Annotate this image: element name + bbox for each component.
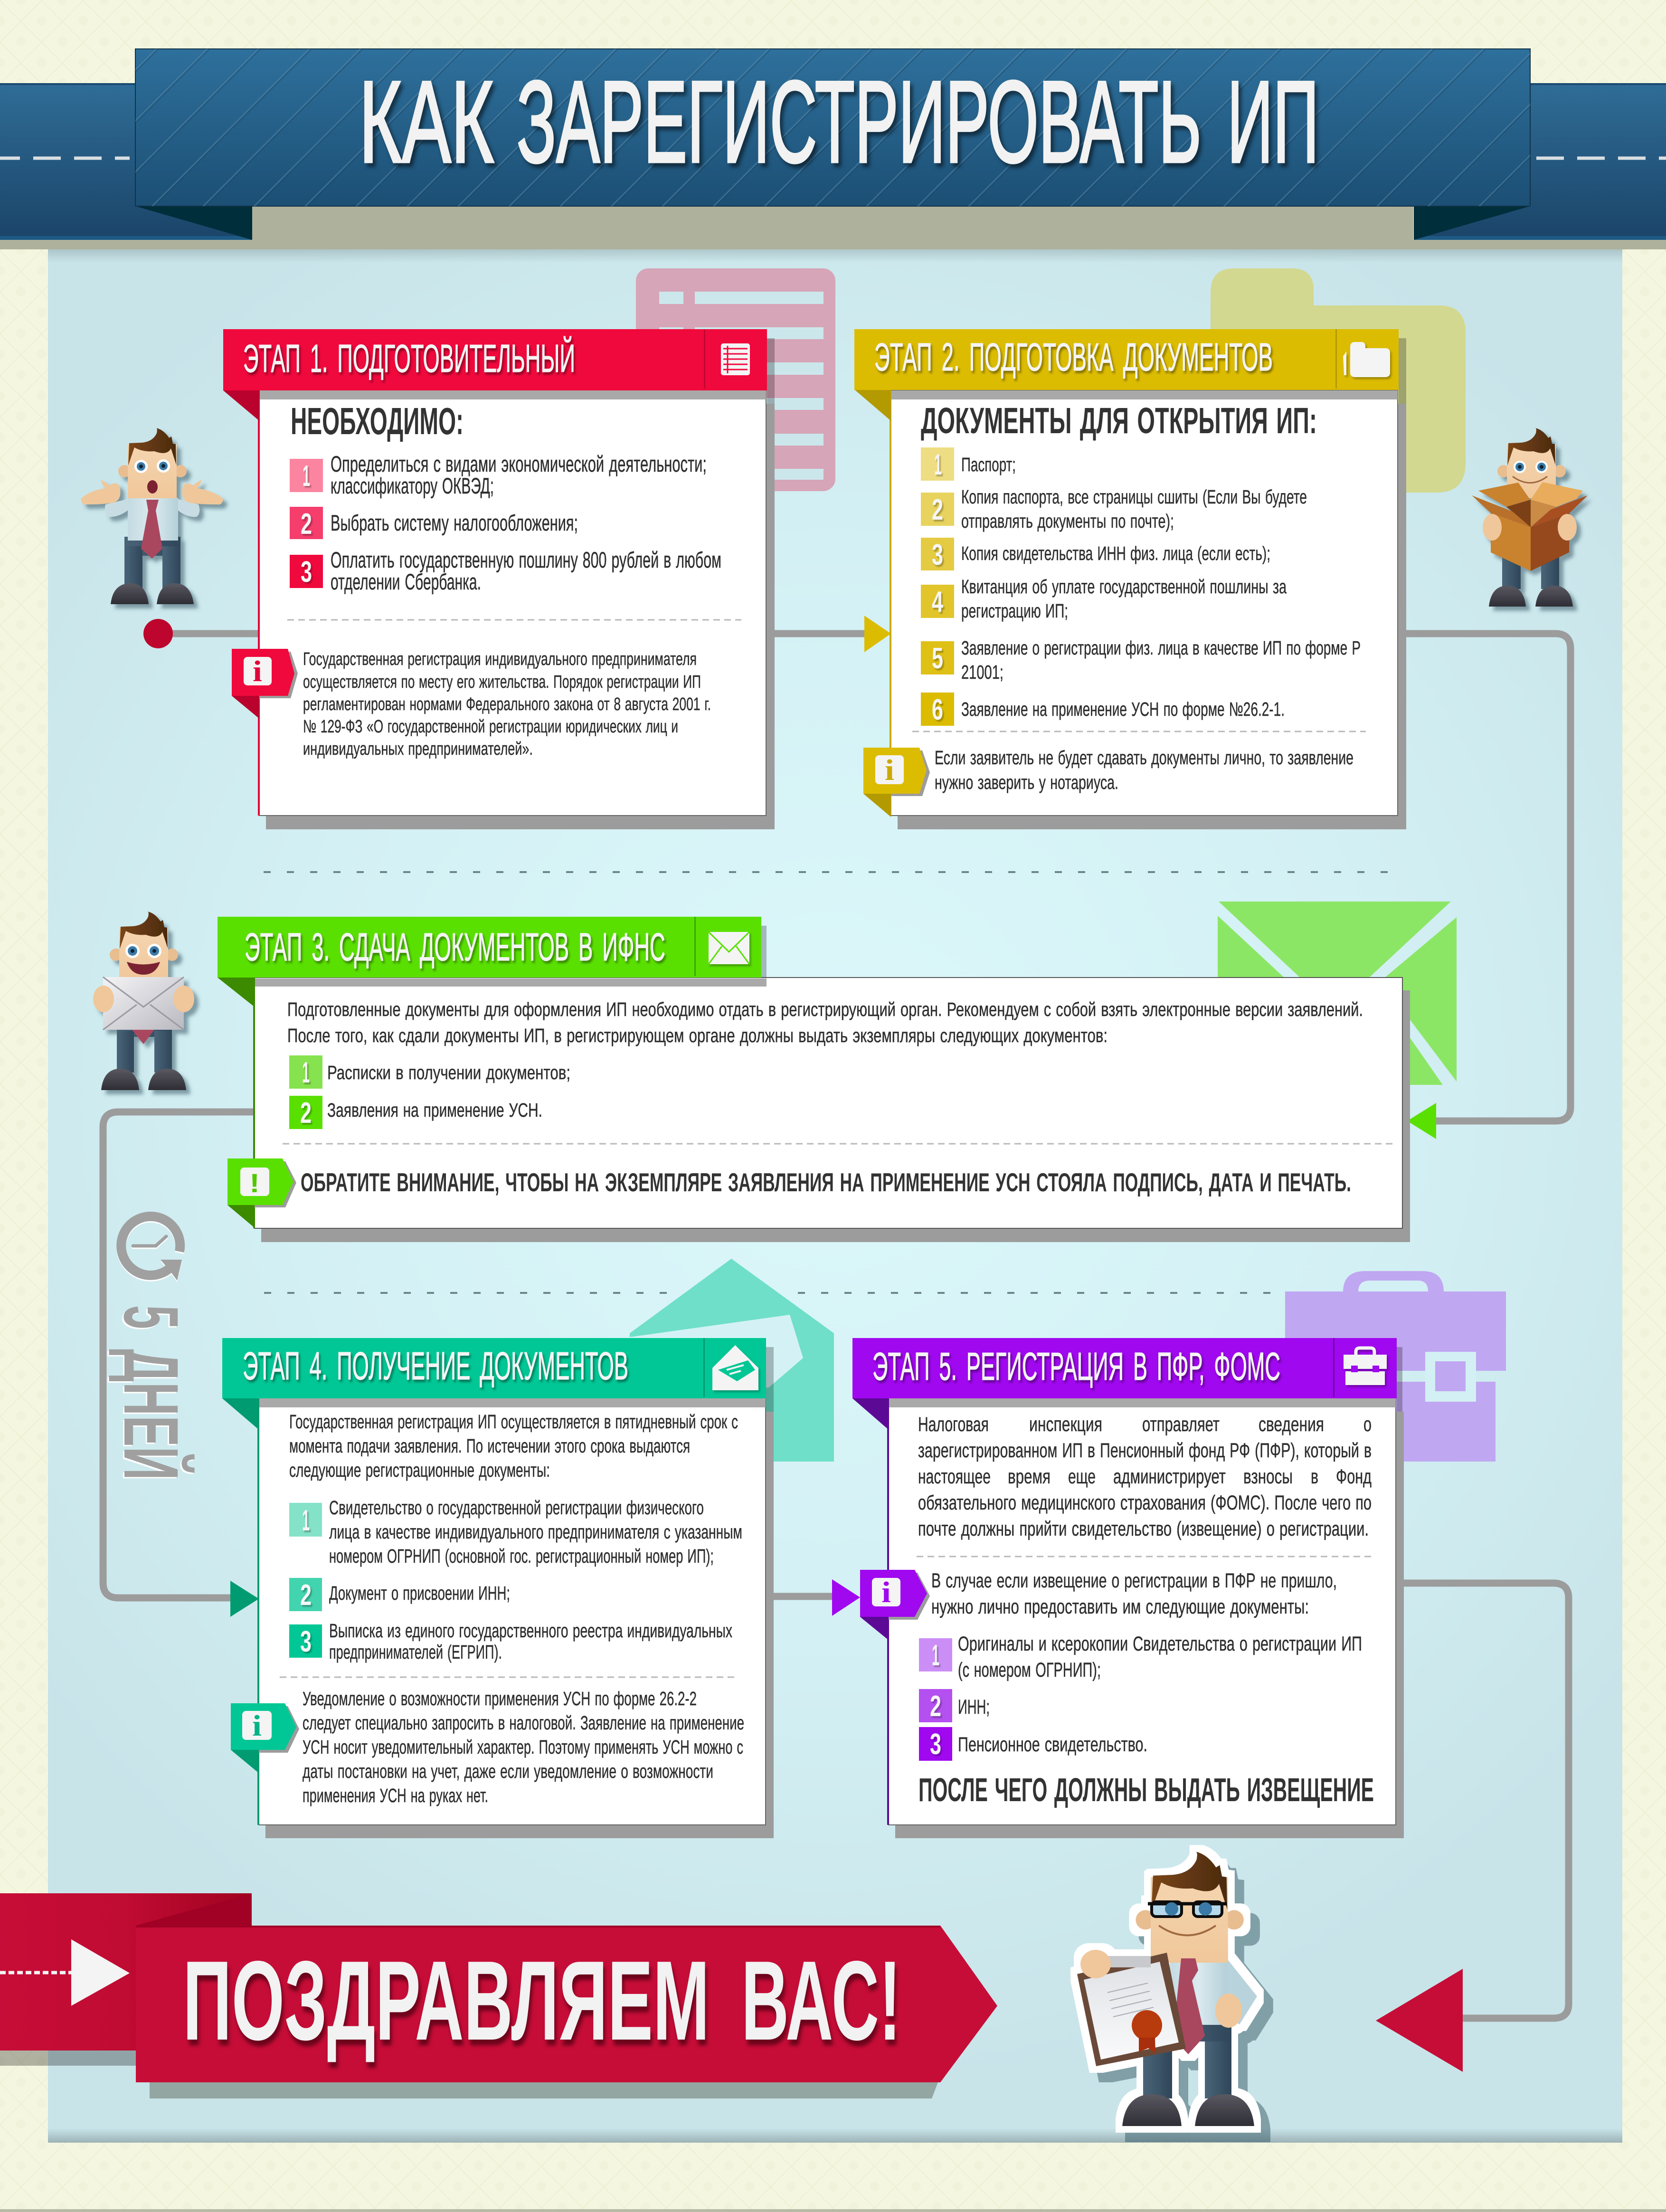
list: stage 5: Пенсионное свидетельство. [958,1733,1147,1756]
panel: stage 5 [852,1338,1404,1838]
header: stage 4: ЭТАП 4. ПОЛУЧЕНИЕ ДОКУМЕНТОВ [243,1344,628,1388]
title ribbon left [0,83,252,240]
info text: stage 5: нужно лично предоставить им следующие документы: [931,1595,1309,1618]
list: stage 3: 2 [300,1097,312,1130]
list: stage 3: 1 [302,1056,310,1089]
info text: stage 4: даты постановки на учет, даже если уведомление о возможности [303,1760,713,1782]
divider dashes between rows [264,872,1389,1293]
list: stage 2: регистрацию ИП; [961,600,1068,622]
intro text: stage 5: о [1363,1413,1372,1436]
list: stage 3 [289,1055,570,1130]
list: stage 1: классификатору ОКВЭД; [331,473,494,498]
info tag: stage 5: i [881,1576,891,1609]
intro text: stage 3 [287,998,1363,1046]
list: stage 1: Определиться с видами экономической деятельности; [331,451,707,476]
arrow: to stage 3 [1407,1103,1436,1139]
clock icon [121,1216,182,1281]
icon: list document [721,343,750,375]
list: stage 1 [290,451,721,594]
list: stage 2: Паспорт; [961,454,1016,475]
intro text: stage 5: инспекция [1029,1413,1102,1436]
panel: stage 4 [222,1338,774,1838]
intro text: stage 4: момента подачи заявления. По истечении этого срока выдаются [289,1435,690,1457]
info text: stage 1 [303,649,711,759]
warning tag: stage 3: ! [249,1168,260,1198]
start dot [143,619,173,648]
header: stage 5 [852,1338,1397,1398]
arrow: to stage 5 [832,1579,860,1616]
intro text: stage 5: зарегистрированном ИП в Пенсионный фонд РФ (ПФР), который в [918,1439,1372,1462]
info text: stage 4: Уведомление о возможности применения УСН по форме 26.2-2 [303,1688,697,1709]
list: stage 5: ИНН; [958,1696,990,1718]
arrow: to stage 2 [864,616,891,652]
list: stage 2: Заявление на применение УСН по форме №26.2-1. [961,698,1285,720]
info text: stage 1: индивидуальных предпринимателей». [303,739,533,759]
list: stage 4: 3 [300,1625,312,1658]
warning tag: stage 3 [227,1158,296,1228]
arrow: to stage 4 [230,1581,259,1617]
finish banner shadow [150,2082,938,2098]
intro text: stage 4 [289,1411,738,1481]
list: stage 2 [921,447,1361,726]
info text: stage 2: Если заявитель не будет сдавать документы лично, то заявление [935,747,1354,769]
list: stage 2: 3 [932,539,943,571]
rotated label: 5 days: ДНЕЙ [108,1349,195,1480]
list: stage 4: 2 [300,1579,312,1612]
intro text: stage 3: После того, как сдали документы ИП, в регистрирующем органе должны выдать экземпляры следующих документов: [287,1025,1108,1046]
title [359,57,1319,187]
info text: stage 1: регламентирован нормами Федерального закона от 8 августа 2001 г. [303,694,711,714]
title: КАК [359,57,494,187]
info text: stage 1: № 129-ФЗ «О государственной регистрации юридических лиц и [303,717,678,737]
panel: stage 3 [218,917,1410,1242]
info text: stage 5: В случае если извещение о регистрации в ПФР не пришло, [931,1569,1337,1592]
icon: envelope [709,932,749,964]
intro text: stage 5: Фонд [1336,1465,1372,1488]
title banner [135,49,1530,206]
info text: stage 1: осуществляется по месту его жительства. Порядок регистрации ИП [303,672,701,692]
info tag: stage 5 [860,1570,930,1640]
list: stage 4: Документ о присвоении ИНН; [329,1582,510,1604]
info tag: stage 4: i [252,1710,262,1742]
info text: stage 4 [303,1688,744,1806]
list: stage 4 [289,1497,742,1663]
character: confused man [81,428,223,604]
intro text: stage 5: почте должны прийти свидетельство (извещение) о регистрации. [918,1518,1369,1540]
heading: stage 2: ДОКУМЕНТЫ ДЛЯ ОТКРЫТИЯ ИП: [921,400,1317,441]
info text: stage 1: Государственная регистрация индивидуального предпринимателя [303,649,697,669]
list: stage 2: отправлять документы по почте); [961,510,1174,532]
header: stage 5: ЭТАП 5. РЕГИСТРАЦИЯ В ПФР, ФОМС [872,1344,1280,1388]
info tag: stage 2 [863,748,930,817]
list: stage 3: Расписки в получении документов; [327,1062,570,1083]
list: stage 5: 2 [930,1690,941,1723]
info tag: stage 4 [231,1703,299,1773]
header: stage 2 [854,329,1399,390]
info tag: stage 1 [232,649,298,719]
list: stage 2: Квитанция об уплате государственной пошлины за [961,576,1287,598]
intro text: stage 5: в [1311,1465,1318,1488]
info tag: stage 1: i [253,655,262,688]
list: stage 4: Выписка из единого государственного реестра индивидуальных [329,1620,732,1642]
intro text: stage 5: обязательного медицинского страхования (ФОМС). После чего по [918,1491,1372,1514]
list: stage 2: 2 [932,494,943,526]
start arrow of finish ribbon [0,1939,130,2006]
icon: open envelope [712,1345,758,1390]
character: man with certificate [1077,1851,1257,2126]
ribbon fold left [135,206,252,240]
list: stage 1: 2 [301,508,312,541]
list: stage 1: Оплатить государственную пошлину 800 рублей в любом [331,547,721,572]
rotated label: 5 days: 5 [108,1305,195,1329]
list: stage 3: Заявления на применение УСН. [327,1099,542,1121]
intro text: stage 4: Государственная регистрация ИП осуществляется в пятидневный срок с [289,1411,738,1433]
list: stage 1: отделении Сбербанка. [331,569,481,594]
intro text: stage 5: сведения [1259,1413,1324,1436]
list: stage 5: 3 [930,1728,941,1761]
character: man with box [1472,428,1588,607]
decorative icon: green envelope [1218,902,1457,1085]
list: stage 2: 4 [932,586,943,618]
intro text: stage 5: Налоговая [918,1413,989,1436]
list: stage 2: 1 [934,448,942,481]
page frame lines [0,2209,1666,2212]
decorative icon: yellow folder [1211,268,1466,493]
list: stage 2: 6 [932,693,943,726]
info text: stage 4: следует специально запросить в налоговой. Заявление на применение [303,1712,744,1734]
intro text: stage 4: следующие регистрационные документы: [289,1459,550,1481]
panel: stage 2 [854,329,1406,829]
finish banner [136,1926,997,2082]
arrow: to finish [1376,1969,1463,2072]
intro text: stage 5: время [1008,1465,1051,1488]
info text: stage 4: УСН носит уведомительный характер. Поэтому применять УСН можно с [303,1736,743,1758]
congratulations text: ПОЗДРАВЛЯЕМ [183,1938,710,2064]
icon: folder [1343,342,1390,377]
list: stage 5: Оригиналы и ксерокопии Свидетельства о регистрации ИП [958,1633,1362,1655]
list: stage 2: 5 [932,642,943,675]
congratulations text: ВАС! [741,1938,901,2064]
intro text: stage 5: отправляет [1142,1413,1220,1436]
list: stage 5: (с номером ОГРНИП); [958,1659,1101,1681]
header: stage 1 [223,329,767,390]
list: stage 1: Выбрать систему налогообложения; [331,510,578,535]
finish ribbon tail [0,1893,252,2066]
info text: stage 2 [935,747,1354,793]
list: stage 1: 3 [301,556,312,589]
list: stage 5: 1 [932,1639,939,1672]
info text: stage 2: нужно заверить у нотариуса. [935,771,1118,793]
info text: stage 5 [931,1569,1337,1618]
rotated label: 5 days [108,1305,195,1480]
title: ИП [1227,57,1319,187]
list: stage 2: Копия свидетельства ИНН физ. лица (если есть); [961,542,1270,564]
intro text: stage 5 [918,1413,1372,1540]
title ribbon right [1414,83,1666,240]
list: stage 1: 1 [303,460,310,493]
header: stage 3: ЭТАП 3. СДАЧА ДОКУМЕНТОВ В ИФНС [245,925,665,969]
decorative icon: pink document [636,268,835,491]
character: man with envelope [93,911,194,1090]
header: stage 4 [222,1338,766,1398]
intro text: stage 5: еще [1068,1465,1096,1488]
ribbon fold right [1414,206,1530,240]
list: stage 4: предпринимателей (ЕГРИП). [329,1641,502,1663]
header: stage 2: ЭТАП 2. ПОДГОТОВКА ДОКУМЕНТОВ [874,335,1273,379]
header: stage 1: ЭТАП 1. ПОДГОТОВИТЕЛЬНЫЙ [243,336,575,380]
decorative icon: purple briefcase [1285,1271,1506,1462]
decorative icon: teal open envelope [630,1259,834,1462]
info text: stage 4: применения УСН на руках нет. [303,1785,488,1806]
title drop shadow band [0,206,1666,249]
intro text: stage 5: настоящее [918,1465,991,1488]
intro text: stage 5: администрирует [1113,1465,1226,1488]
info tag: stage 2: i [885,754,894,787]
list: stage 2: Копия паспорта, все страницы сшиты (Если Вы будете [961,486,1307,508]
panel: stage 1 [223,329,775,829]
intro text: stage 5: взносы [1243,1465,1293,1488]
list: stage 4: номером ОГРНИП (основной гос. регистрационный номер ИП); [329,1545,714,1567]
list: stage 2: 21001; [961,661,1003,683]
list: stage 2: Заявление о регистрации физ. лица в качестве ИП по форме Р [961,637,1361,659]
heading: stage 1: НЕОБХОДИМО: [291,400,464,442]
list: stage 4: 1 [302,1504,310,1537]
connector lines [103,634,1571,2018]
icon: briefcase [1344,1348,1387,1385]
list: stage 4: Свидетельство о государственной регистрации физического [329,1497,704,1519]
header: stage 3 [218,917,761,978]
list: stage 5 [919,1633,1362,1761]
list: stage 4: лица в качестве индивидуального предпринимателя с указанным [329,1521,742,1543]
